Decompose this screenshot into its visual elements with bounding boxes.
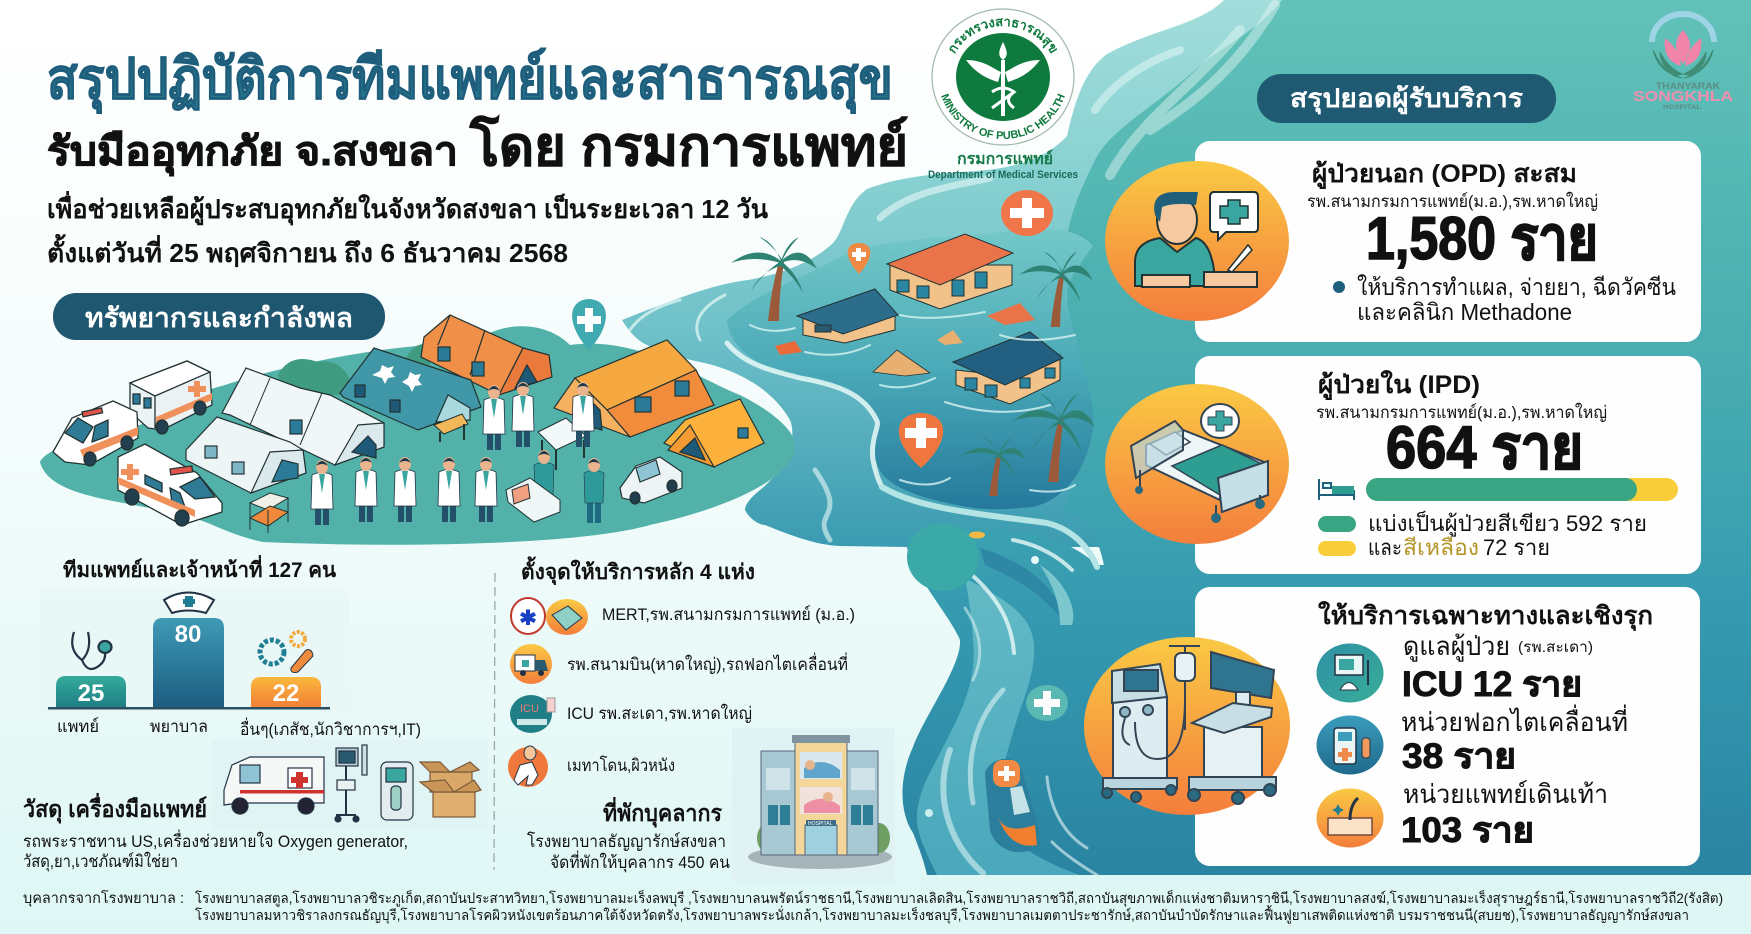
icon: hospital bed — [1105, 384, 1289, 544]
panel: IPD card — [1105, 356, 1701, 574]
legend: yellow patients: และ — [1368, 535, 1402, 560]
orange tent back — [421, 315, 552, 395]
legend: green patients: แบ่งเป็นผู้ป่วยสีเขียว 592 ราย — [1368, 509, 1647, 537]
accommodation text line 2: จัดที่พักให้บุคลากร 450 คน — [550, 850, 730, 873]
panel: OPD card — [1105, 141, 1701, 342]
bar: nurses 80: 80 — [175, 621, 201, 648]
card heading: ผู้ป่วยนอก (OPD) สะสม — [1312, 160, 1577, 190]
small orange pin — [848, 243, 870, 274]
service: ICU: (รพ.สะเดา) — [1518, 639, 1593, 656]
medical pin — [572, 299, 606, 350]
bullet — [1333, 281, 1345, 293]
illustration: field hospital camp — [40, 299, 795, 545]
point: airfield and mobile dialysis: รพ.สนามบิน(หาดใหญ่),รถฟอกไตเคลื่อนที่ — [567, 652, 848, 674]
service: mobile dialysis: 38 ราย — [1402, 737, 1516, 776]
bar: others 22: 22 — [273, 680, 299, 707]
illustration: supply boxes — [420, 762, 481, 817]
materials text line 2: วัสดุ,ยา,เวชภัณฑ์มิใช่ยา — [23, 851, 178, 872]
ambulance front — [118, 444, 222, 526]
materials text line 1: รถพระราชทาน US,เครื่องช่วยหายใจ Oxygen generator, — [23, 829, 408, 851]
service: mobile dialysis — [1316, 704, 1628, 776]
white van — [620, 457, 682, 504]
teal tent — [340, 348, 481, 430]
legend: yellow patients: สีเหลือง — [1403, 535, 1479, 560]
icon: ICU monitor — [1316, 644, 1384, 702]
yellow tent — [664, 399, 764, 467]
legend: yellow patients — [1318, 535, 1550, 560]
department name thai: กรมการแพทย์ — [957, 149, 1053, 168]
OPD total: 1,580 ราย — [1366, 205, 1598, 272]
bar: others 22 — [251, 677, 321, 708]
IPD total: 664 ราย — [1386, 414, 1583, 481]
title line 1: สรุปปฏิบัติการทีมแพทย์และสาธารณสุข — [47, 47, 893, 114]
illustration: hospital accommodation: HOSPITAL — [808, 821, 833, 827]
palm tree 1 — [731, 237, 817, 321]
rescue boat — [985, 759, 1040, 852]
bar: nurses 80 — [153, 618, 224, 708]
bushes — [278, 344, 430, 395]
illustration: oxygen generator — [381, 762, 413, 820]
card heading: ผู้ป่วยใน (IPD) — [1318, 369, 1480, 401]
icon: skin section — [1316, 788, 1384, 848]
card heading: ให้บริการเฉพาะทางและเชิงรุก — [1318, 600, 1653, 632]
title line 2 left part: รับมืออุทกภัย จ.สงขลา — [47, 130, 458, 177]
illustration: hospital accommodation — [732, 728, 895, 882]
icon: nurse cap — [164, 592, 214, 613]
logo: ministry of public health — [931, 8, 1075, 146]
stacked bar: green vs yellow patients — [1366, 478, 1678, 501]
panel: medical equipment — [212, 740, 488, 829]
large orange pin — [899, 413, 943, 468]
point: MERT: MERT,รพ.สนามกรมการแพทย์ (ม.อ.) — [602, 605, 855, 624]
small table — [434, 414, 468, 442]
lower river markers — [907, 523, 1068, 721]
accommodation text line 1: โรงพยาบาลธัญญารักษ์สงขลา — [527, 831, 726, 851]
house with dark roof — [953, 332, 1063, 404]
accommodation heading: ที่พักบุคลากร — [603, 796, 723, 828]
chart panel: medical staff 127 — [40, 554, 421, 739]
service: foot medical unit — [1316, 779, 1608, 850]
table — [538, 418, 586, 470]
service: ICU — [1316, 631, 1593, 704]
illustration: ventilator cart — [335, 745, 367, 822]
island ground — [40, 326, 795, 545]
section: 4 service points — [508, 556, 855, 787]
icon: nurse treating wound — [1105, 161, 1289, 321]
section: staff accommodation — [527, 728, 895, 882]
title line 2 right part: โดย กรมการแพทย์ — [469, 115, 908, 177]
subtitle line 2: ตั้งแต่วันที่ 25 พฤศจิกายน ถึง 6 ธันวาคม 2568 — [47, 233, 568, 268]
bar: doctors 25 — [56, 676, 126, 708]
orange medical badge — [1001, 190, 1053, 236]
footer strip — [0, 875, 1751, 934]
legend: yellow patients: 72 ราย — [1483, 535, 1550, 560]
bar: doctors 25: 25 — [78, 680, 104, 707]
service: ICU: ดูแลผู้ป่วย — [1403, 631, 1510, 662]
axis — [48, 707, 330, 710]
logo: ministry of public health: MINISTRY OF PUBLIC HEALTH — [941, 94, 1065, 139]
point: MERT — [511, 598, 855, 635]
illustration: ambulance — [224, 757, 324, 814]
heading pill: resources — [53, 293, 385, 340]
hospital list line 2: โรงพยาบาลมหาวชิราลงกรณธัญบุรี,โรงพยาบาลโรคผิวหนังเขตร้อนภาคใต้จังหวัดตรัง,โรงพยาบาลพระนั่งเกล้า,โรงพยาบาลมะเร็งชลบุรี,โรงพยาบาลเมตตาประชารักษ์,สถาบันบำบัดรักษาและฟื้นฟูยาเสพติดแห่งชาติ บรมราชชนนี(สบยช),โรงพยาบาลธัญญารักษ์สงขลา — [195, 905, 1689, 924]
heading: materials and equipment: วัสดุ เครื่องมือแพทย์ — [23, 792, 207, 824]
heading pill: service summary: สรุปยอดผู้รับบริการ — [1290, 83, 1523, 115]
service: ICU: ICU 12 ราย — [1402, 665, 1582, 704]
point: airfield and mobile dialysis — [510, 644, 848, 684]
logo: ministry of public health: กระทรวงสาธารณสุข — [950, 18, 1058, 54]
footer label: บุคลากรจากโรงพยาบาล : — [23, 889, 184, 907]
box truck — [130, 361, 212, 434]
label: doctors: แพทย์ — [57, 717, 99, 736]
water ripples — [750, 312, 1075, 492]
point: ICU: ICU — [520, 703, 539, 715]
section heading: ตั้งจุดให้บริการหลัก 4 แห่ง — [521, 556, 755, 586]
service: foot medical unit: หน่วยแพทย์เดินเท้า — [1403, 779, 1608, 809]
service text line 2: และคลินิก Methadone — [1357, 299, 1572, 325]
medical staff group — [311, 382, 604, 525]
supply cart — [250, 493, 288, 533]
service: foot medical unit: 103 ราย — [1401, 811, 1534, 850]
icon: gears and pill — [260, 632, 313, 672]
card subheading: รพ.สนามกรมการแพทย์(ม.อ.),รพ.หาดใหญ่ — [1316, 402, 1607, 422]
subtitle line 1: เพื่อช่วยเหลือผู้ประสบอุทกภัยในจังหวัดสงขลา เป็นระยะเวลา 12 วัน — [47, 190, 768, 226]
logo: thanyarak songkhla: THANYARAK — [1656, 81, 1721, 91]
ambulance left — [53, 401, 138, 466]
point: ICU: ICU รพ.สะเดา,รพ.หาดใหญ่ — [567, 703, 752, 723]
heading pill: resources: ทรัพยากรและกำลังพล — [85, 303, 353, 333]
logo: thanyarak songkhla: SONGKHLA — [1633, 88, 1733, 105]
heading pill: service summary — [1257, 74, 1556, 123]
logo: thanyarak songkhla: HOSPITAL — [1663, 105, 1701, 111]
white tents — [186, 368, 384, 493]
panel: specialized services card — [1084, 587, 1700, 866]
point: ICU — [510, 695, 752, 733]
river and teal water background — [622, 0, 1751, 875]
house with blue roof — [797, 289, 898, 343]
icon: dialysis unit — [1316, 716, 1384, 774]
service text line 1: ให้บริการทำแผล, จ่ายยา, ฉีดวัคซีน — [1357, 274, 1676, 300]
logo: thanyarak songkhla — [1633, 14, 1733, 111]
icon: dialysis and ICU machines — [1084, 637, 1290, 815]
palm tree 4 — [962, 437, 1026, 496]
palm tree 2 — [1019, 251, 1092, 327]
chart heading: ทีมแพทย์และเจ้าหน้าที่ 127 คน — [63, 554, 337, 582]
house with orange roof — [887, 234, 1013, 309]
floating roof and debris — [775, 303, 1035, 376]
service: mobile dialysis: หน่วยฟอกไตเคลื่อนที่ — [1401, 704, 1628, 737]
department name english: Department of Medical Services — [928, 169, 1078, 181]
icon: stethoscope — [72, 632, 112, 669]
point: methadone and dermatology — [508, 746, 675, 787]
icon: small bed — [1319, 479, 1354, 500]
point: methadone and dermatology: เมทาโดน,ผิวหนัง — [567, 755, 675, 775]
patient bed — [506, 478, 560, 522]
card subheading: รพ.สนามกรมการแพทย์(ม.อ.),รพ.หาดใหญ่ — [1307, 191, 1598, 211]
palm tree 3 — [1013, 394, 1095, 482]
label: others: อื่นๆ(เภสัช,นักวิชาการฯ,IT) — [240, 717, 421, 739]
illustration: flooded town — [731, 190, 1095, 852]
label: nurses: พยาบาล — [150, 717, 208, 736]
orange tent right — [554, 340, 714, 437]
